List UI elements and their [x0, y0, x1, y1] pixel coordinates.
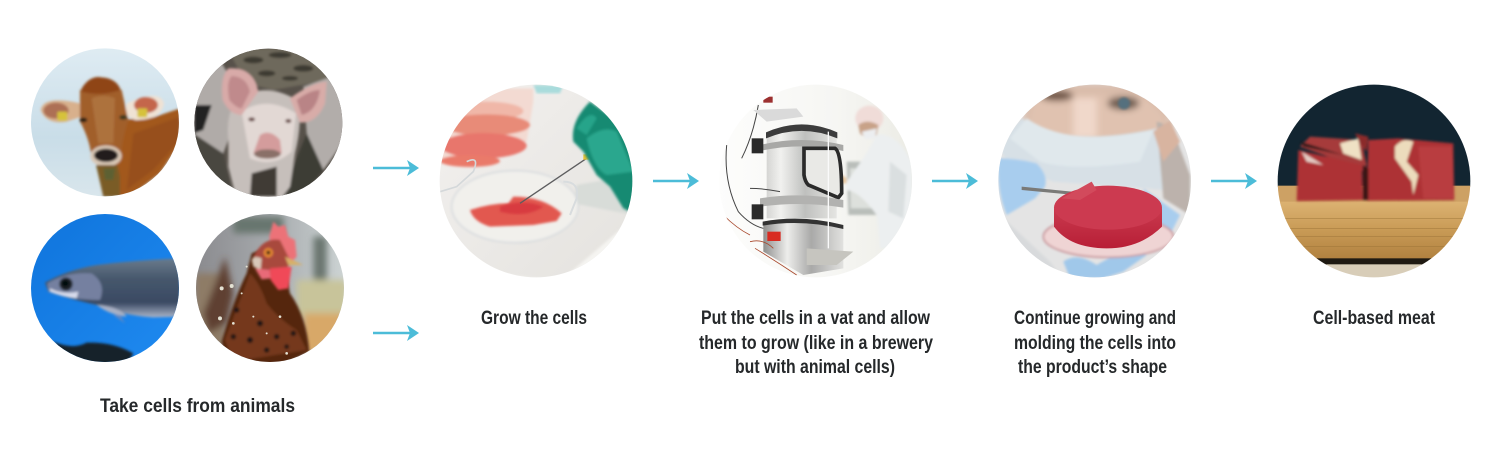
caption: take cells from animals: Take cells from animals [100, 396, 295, 417]
photo: fish [30, 213, 180, 365]
caption: put the cells in a vat: but with animal cells) [735, 357, 895, 378]
photo: chicken [195, 213, 347, 367]
photo: technician holding patty [997, 83, 1193, 280]
arrow: bottom animal row to step two [373, 325, 419, 341]
group: growing cells and vat photos [438, 83, 917, 283]
arrow: step four to step five [1211, 173, 1257, 189]
caption: cell-based meat: Cell-based meat [1313, 308, 1436, 329]
caption: continue growing and molding [1014, 308, 1176, 378]
photo: bioreactor vat with technician [726, 85, 912, 277]
photo: cow [30, 47, 180, 198]
caption: continue growing and molding: Continue growing and [1014, 308, 1176, 329]
photo: petri dish with cells [438, 83, 637, 282]
caption: put the cells in a vat: them to grow (like in a brewery [699, 333, 933, 354]
caption: put the cells in a vat: Put the cells in a vat and allow [701, 308, 930, 329]
arrow: top animal row to step two [373, 160, 419, 176]
caption: continue growing and molding: the product’s shape [1018, 357, 1167, 378]
arrow: step three to step four [932, 173, 978, 189]
photo: finished cuts of meat on wood board [1277, 83, 1473, 281]
caption: continue growing and molding: molding the cells into [1014, 333, 1176, 354]
burger patty [1054, 182, 1162, 248]
group: patty and finished meat photos [997, 83, 1473, 281]
arrow: step two to step three [653, 173, 699, 189]
group: animal photos [30, 47, 347, 367]
caption: grow the cells: Grow the cells [481, 308, 587, 329]
photo: pig [193, 47, 345, 200]
caption: put the cells in a vat [699, 308, 933, 378]
